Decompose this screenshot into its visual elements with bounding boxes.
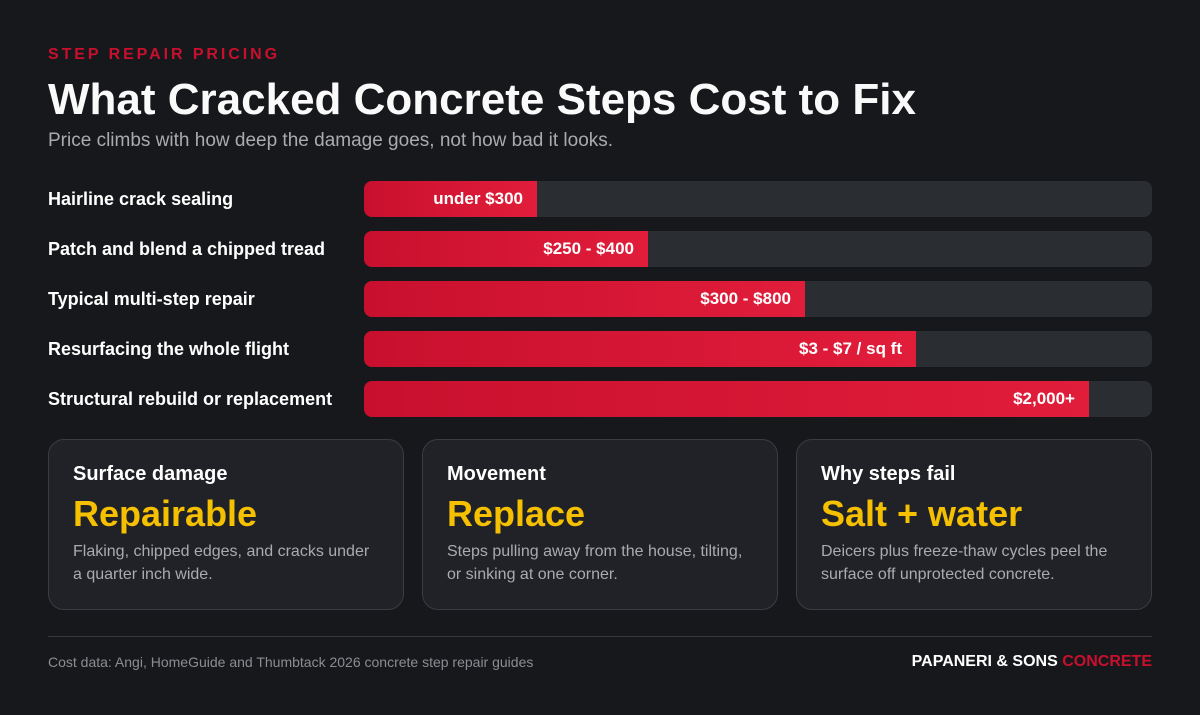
- label: typical multi-step repair: Typical multi-step repair: [48, 289, 255, 309]
- bar: resurfacing: [364, 331, 1152, 367]
- bar: structural rebuild: $2,000+: [1013, 389, 1075, 408]
- bar: hairline crack sealing: under $300: [433, 189, 523, 208]
- bar: typical multi-step repair: [364, 281, 1152, 317]
- panel: movement: [422, 439, 778, 610]
- panel: why steps fail: Why steps fail: [821, 463, 955, 485]
- panel: why steps fail: Deicers plus freeze-thaw cycles peel the: [821, 543, 1107, 560]
- panel: why steps fail: Salt + water: [821, 493, 1022, 534]
- panel: surface damage: Repairable: [73, 493, 257, 534]
- subtitle: Price climbs with how deep the damage goes, not how bad it looks.: [48, 130, 613, 151]
- brand: PAPANERI & SONS CONCRETE: [912, 653, 1152, 670]
- source note: Cost data: Angi, HomeGuide and Thumbtack 2026 concrete step repair guides: [48, 654, 533, 670]
- bar: patch and blend: [364, 231, 1152, 267]
- bar: structural rebuild: [364, 381, 1152, 417]
- panel: movement: Steps pulling away from the house, tilting,: [447, 543, 742, 560]
- bar: patch and blend: $250 - $400: [543, 239, 634, 258]
- panel: why steps fail: surface off unprotected concrete.: [821, 566, 1055, 583]
- panel: why steps fail: [796, 439, 1152, 610]
- panel: surface damage: a quarter inch wide.: [73, 566, 213, 583]
- panel: surface damage: [48, 439, 404, 610]
- panel: movement: Replace: [447, 493, 585, 534]
- bar: hairline crack sealing: [364, 181, 1152, 217]
- panel: surface damage: Surface damage: [73, 463, 228, 485]
- panel: movement: Movement: [447, 463, 546, 485]
- label: resurfacing: Resurfacing the whole flight: [48, 339, 289, 359]
- eyebrow: STEP REPAIR PRICING: [48, 46, 280, 63]
- label: hairline crack sealing: Hairline crack sealing: [48, 189, 233, 209]
- bar: typical multi-step repair: $300 - $800: [700, 289, 791, 308]
- label: patch and blend: Patch and blend a chipped tread: [48, 239, 325, 259]
- label: structural rebuild: Structural rebuild or replacement: [48, 389, 332, 409]
- panel: surface damage: Flaking, chipped edges, and cracks under: [73, 543, 369, 560]
- bar: resurfacing: $3 - $7 / sq ft: [799, 339, 902, 358]
- title: What Cracked Concrete Steps Cost to Fix: [48, 75, 916, 124]
- panel: movement: or sinking at one corner.: [447, 566, 618, 583]
